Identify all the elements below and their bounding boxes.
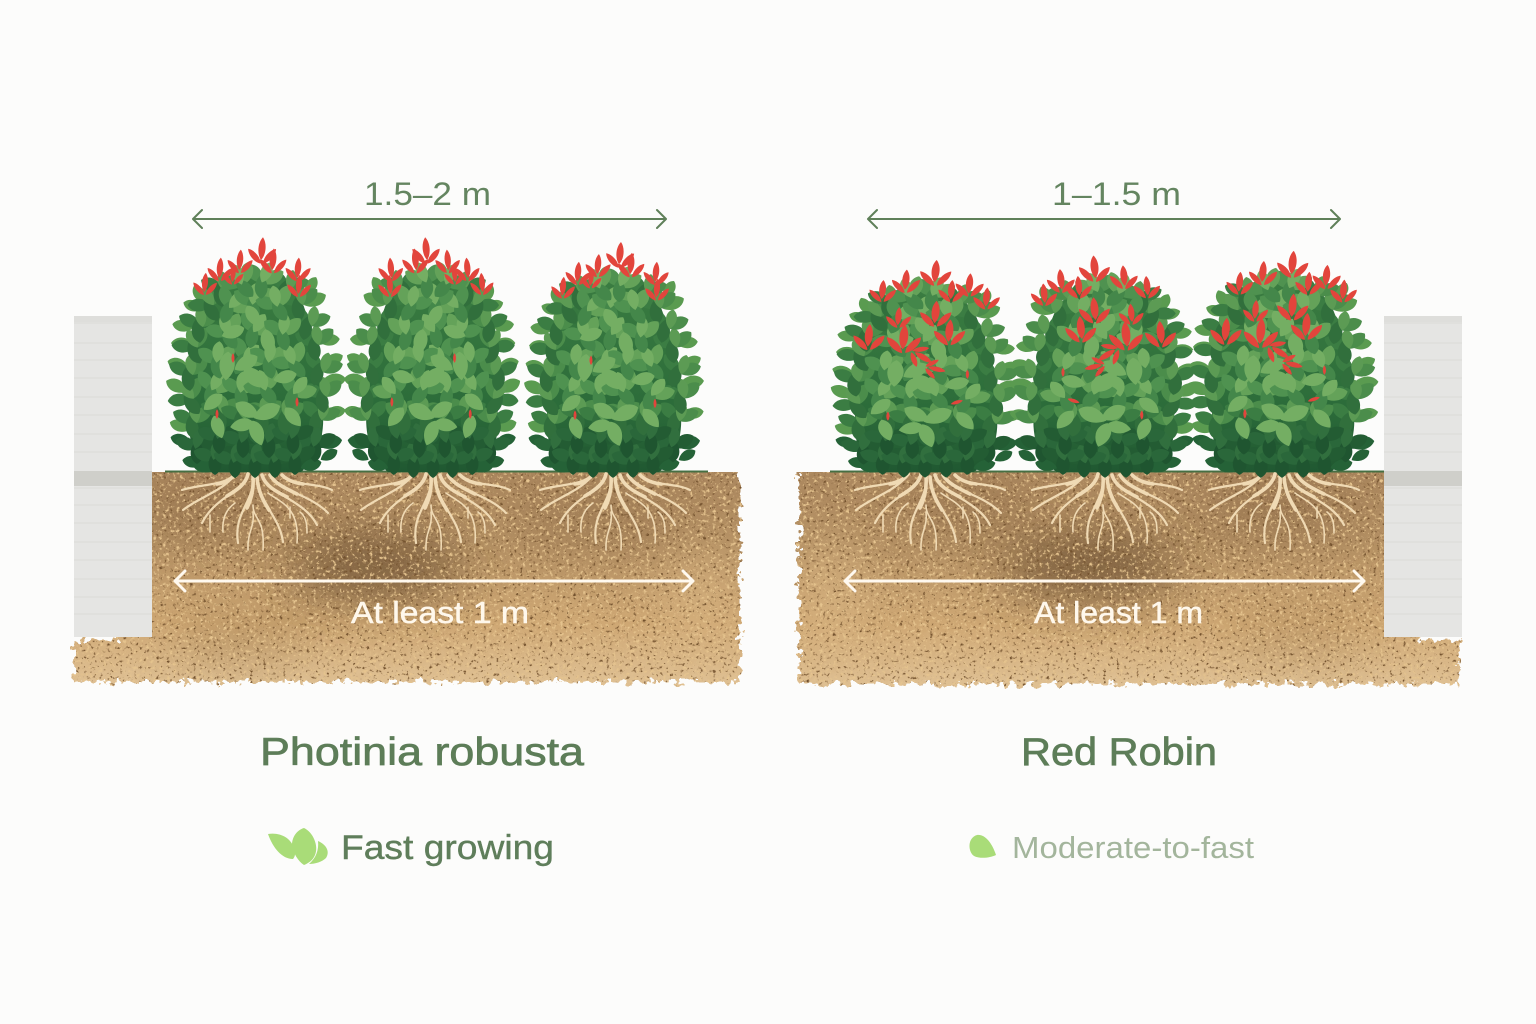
roots: Photinia robusta plants <box>182 474 690 550</box>
label: At least 1 m right: At least 1 m <box>1034 595 1203 630</box>
ground line: left <box>165 470 708 472</box>
spacing arrow: right bed <box>845 571 1364 591</box>
label: Fast growing: Fast growing <box>341 829 554 867</box>
ground line: right <box>830 470 1384 472</box>
wall: right <box>1384 316 1462 637</box>
width arrow: 1.5–2 m <box>193 210 666 228</box>
shrub: Red Robin 1 <box>825 260 1024 478</box>
label: 1–1.5 m: 1–1.5 m <box>1052 176 1181 212</box>
heading: Photinia robusta: Photinia robusta <box>260 731 584 774</box>
icon: moderate growth leaf <box>969 835 996 858</box>
roots: Red Robin plants <box>855 474 1359 550</box>
heading: Red Robin: Red Robin <box>1021 731 1217 774</box>
spacing arrow: left bed <box>175 571 693 591</box>
width arrow: 1–1.5 m <box>868 210 1340 228</box>
shrub: Red Robin 2 <box>1007 255 1204 478</box>
shrub: Photinia robusta 2 <box>341 237 526 478</box>
label: Moderate-to-fast: Moderate-to-fast <box>1012 830 1254 865</box>
shrub: Photinia robusta 3 <box>518 242 707 478</box>
shrub: Photinia robusta 1 <box>160 237 349 478</box>
wall: left <box>74 316 152 637</box>
panel: Photinia robusta soil bed <box>74 450 740 682</box>
shrub: Red Robin 3 <box>1182 251 1381 478</box>
label: At least 1 m left: At least 1 m <box>351 595 529 630</box>
panel: Red Robin soil bed <box>794 450 1459 684</box>
icon: fast growing leaves <box>268 828 328 865</box>
label: 1.5–2 m: 1.5–2 m <box>364 176 491 212</box>
